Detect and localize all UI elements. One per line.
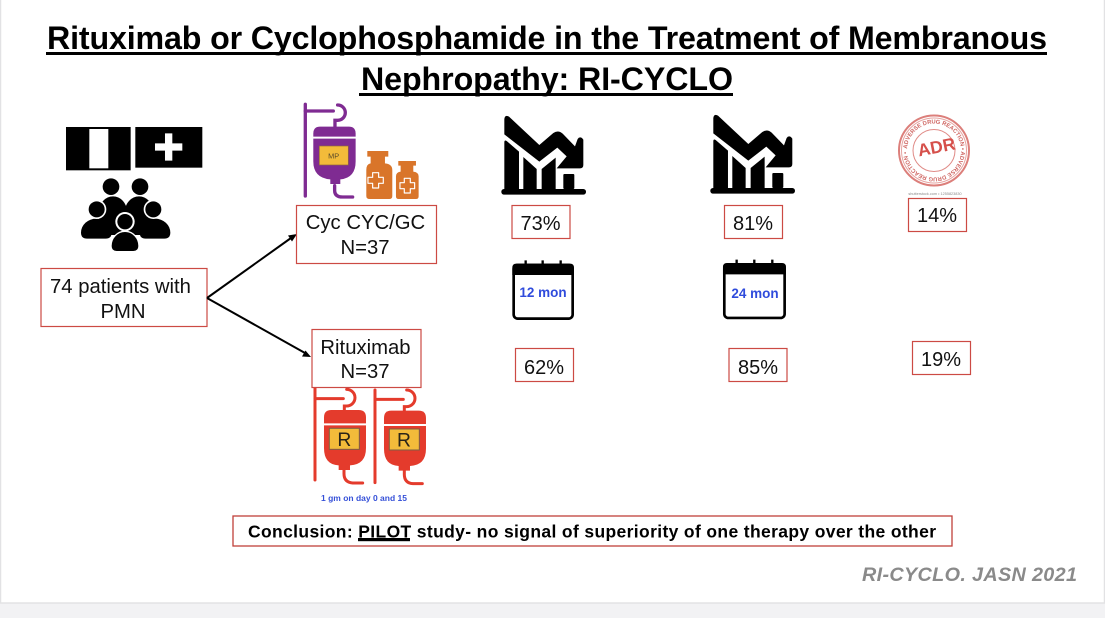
box: 73%: 73% [520,213,561,235]
icon: declining chart, 12 months [501,116,586,195]
arrow: to cyclophosphamide arm [207,234,297,298]
box: 62%: 62% [524,357,564,379]
box: 14% [908,198,966,232]
title [46,20,1047,97]
box: 85%: 85% [738,357,778,379]
box: 14%: 14% [917,205,957,227]
stock image caption: shutterstock.com • 1255823830 [908,192,962,196]
icon: declining chart, 24 months [710,115,795,194]
box: 19% [912,342,970,374]
box: 74 patients with PMN: PMN [100,301,146,323]
title: Rituximab or Cyclophosphamide in the Treatment of Membranous [47,20,1047,56]
box: 85% [729,348,787,382]
box: 62% [516,348,574,382]
box: Cyc CYC/GC arm: Cyc CYC/GC [306,212,425,234]
conclusion box: Conclusion: PILOT study- no signal of superiority of one therapy over the other [248,522,936,542]
box: Cyc CYC/GC arm: N=37 [340,237,390,259]
citation: RI-CYCLO. JASN 2021 [862,564,1077,586]
icon: calendar 24 months [723,260,786,318]
calendar label: 24 mon: 24 mon [731,286,779,301]
conclusion box [233,516,952,546]
calendar label: 12 mon: 12 mon [519,285,567,300]
box: Rituximab arm: Rituximab [320,337,411,359]
box: 19%: 19% [921,349,961,371]
icon: flag blocks with plus sign [66,127,202,170]
box: Rituximab arm [312,330,421,388]
icon: red rituximab IV bags: R [397,431,411,452]
box: Cyc CYC/GC arm [296,206,436,264]
box: 73% [512,206,570,238]
box: Rituximab arm: N=37 [340,361,390,383]
icon: red rituximab IV bags: R [337,430,351,451]
icon: patient group [81,178,170,252]
arrow: to rituximab arm [207,298,311,357]
box: 81%: 81% [733,213,773,235]
box: 74 patients with PMN: 74 patients with [50,276,191,298]
title: Nephropathy: RI-CYCLO [361,61,733,97]
icon: purple IV bag and orange bottles: MP [328,151,339,160]
box: 74 patients with PMN [41,268,207,326]
icon: red rituximab IV bags [315,387,426,484]
icon: ADR stamp: ADVERSE DRUG REACTION • ADVERSE DRUG REACTION • [903,120,965,182]
dosing note: 1 gm on day 0 and 15 [321,493,407,503]
icon: calendar 12 months [512,260,574,319]
box: 81% [724,206,782,238]
icon: purple IV bag and orange bottles [305,104,419,199]
icon: ADR stamp: ADR [916,133,957,160]
